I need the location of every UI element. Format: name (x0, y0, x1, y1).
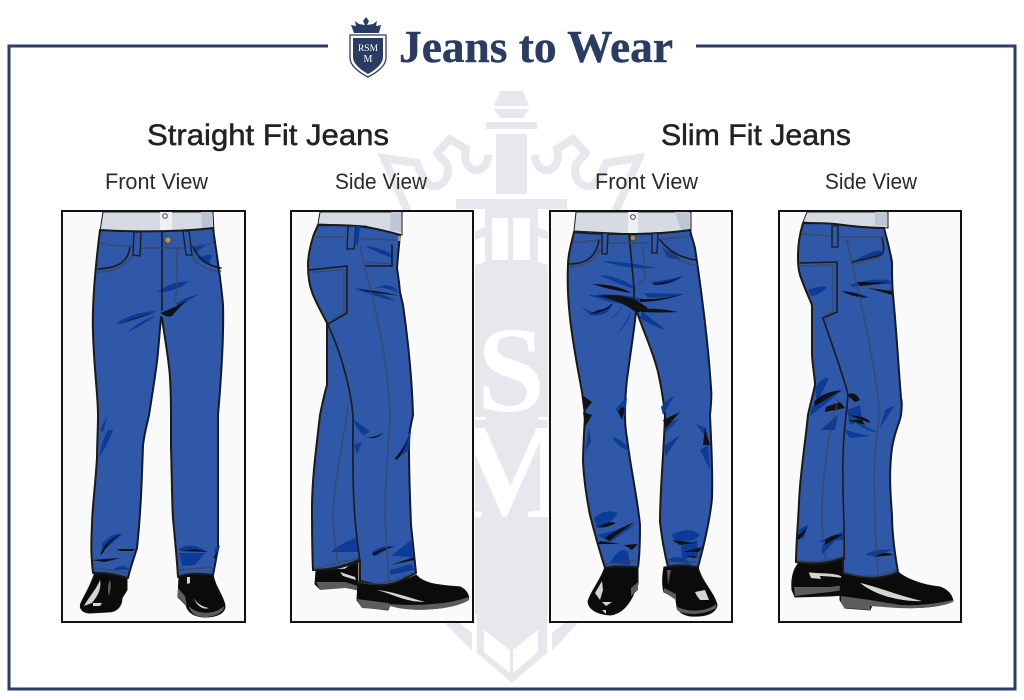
label: straight side view: Side View (335, 169, 427, 194)
watermark crest (384, 91, 639, 683)
logo: M (364, 54, 373, 65)
jeans (308, 225, 416, 585)
logo (350, 17, 386, 77)
shoes (80, 571, 225, 617)
heading: straight fit: Straight Fit Jeans (147, 119, 389, 152)
shirt (318, 212, 402, 235)
shirt (100, 212, 214, 232)
shoes (588, 566, 717, 616)
label: slim front view: Front View (595, 169, 698, 194)
watermark crest: M (448, 397, 576, 547)
shirt (803, 212, 888, 228)
label: slim side view: Side View (825, 169, 917, 194)
shirt (574, 212, 691, 234)
panel: straight fit front view (62, 211, 245, 622)
panel: slim fit side view (779, 211, 961, 622)
shoes (792, 558, 953, 610)
jeans (796, 223, 902, 578)
label: straight front view: Front View (105, 169, 208, 194)
jeans (568, 230, 712, 568)
title: Jeans to Wear (399, 21, 673, 72)
watermark crest: S (477, 303, 545, 438)
heading: slim fit: Slim Fit Jeans (661, 119, 851, 152)
panel: slim fit front view (550, 211, 732, 622)
jeans (91, 228, 223, 578)
logo: RSM (358, 44, 379, 54)
shoes (315, 560, 469, 610)
panel: straight fit side view (291, 211, 473, 622)
